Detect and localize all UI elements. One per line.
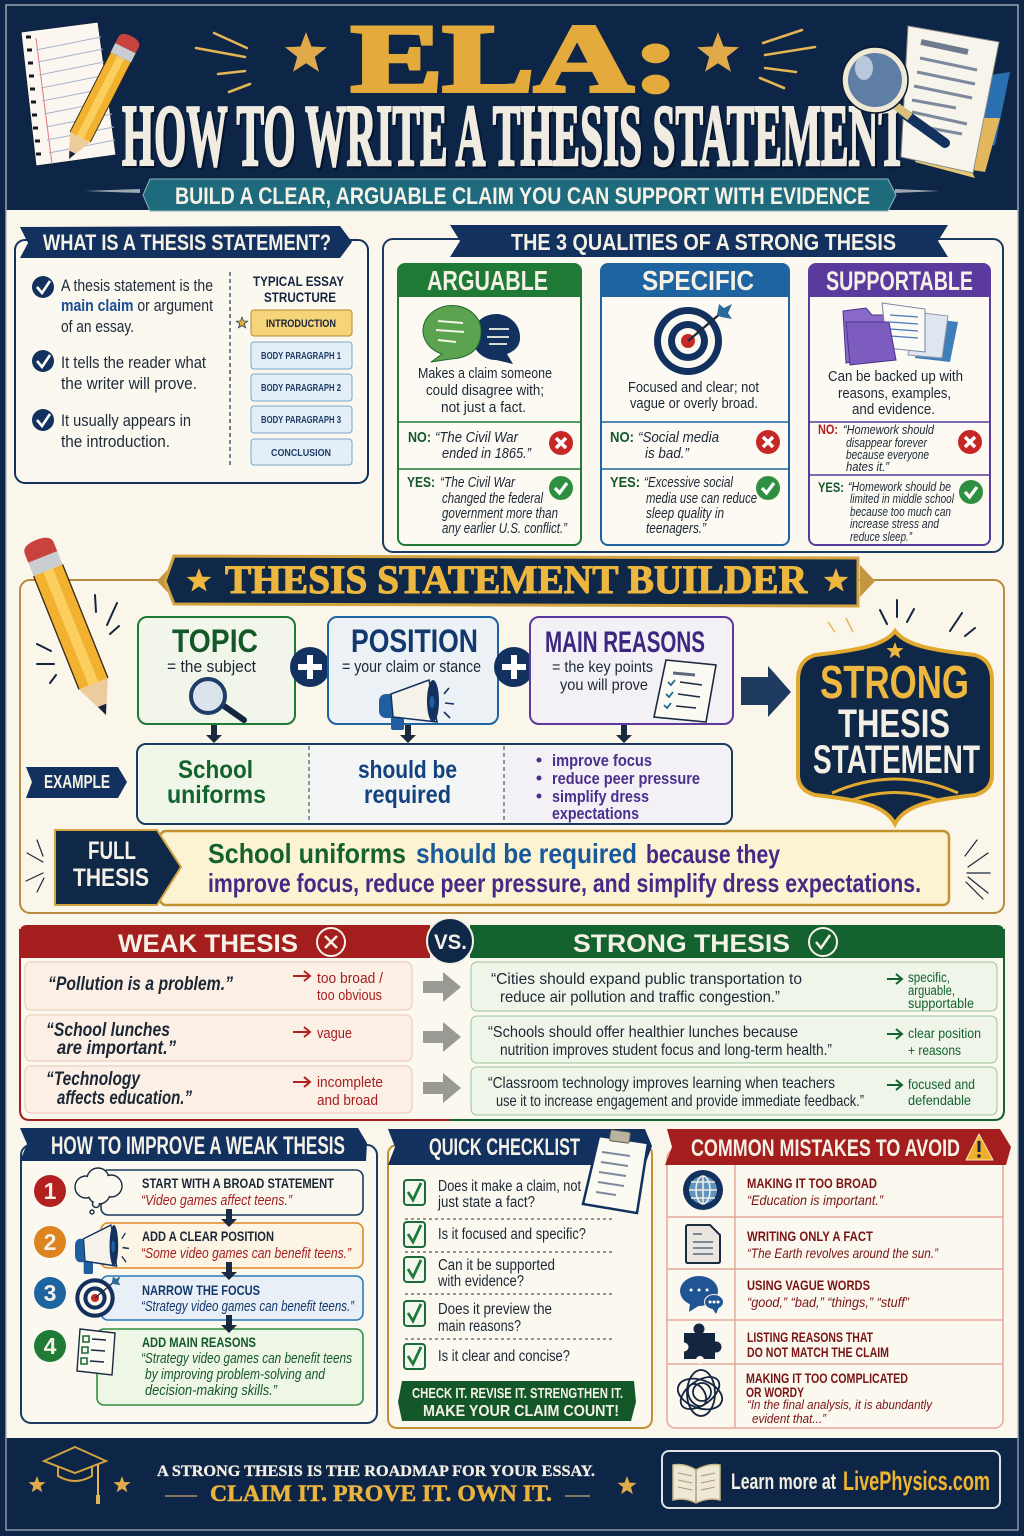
step 4: decision-making skills.” bbox=[145, 1382, 278, 1399]
panel: common mistakes bbox=[665, 1129, 1011, 1428]
card: supportable: disappear forever bbox=[846, 436, 928, 450]
chart: typical essay structure: CONCLUSION bbox=[271, 447, 331, 459]
list: strong examples bbox=[471, 962, 997, 1115]
card: arguable: government more than bbox=[442, 506, 558, 522]
step 4: 4 bbox=[44, 1333, 57, 1359]
box: topic: = the subject bbox=[167, 657, 256, 676]
card: arguable: not just a fact. bbox=[441, 399, 526, 416]
callout: full thesis: THESIS bbox=[73, 864, 149, 892]
callout: learn more bbox=[662, 1451, 1000, 1508]
icon: documents and magnifier bbox=[842, 26, 1010, 178]
header: strong thesis bbox=[470, 925, 1004, 958]
badge: strong thesis statement: THESIS bbox=[838, 702, 950, 746]
icon: speech bubbles bbox=[680, 1276, 724, 1314]
icon: large pencil bbox=[22, 534, 120, 721]
icon: graduation cap bbox=[44, 1447, 106, 1504]
box: example row: reduce peer pressure bbox=[552, 769, 700, 788]
row: too broad: MAKING IT TOO BROAD bbox=[747, 1175, 877, 1191]
list: strong examples: reduce air pollution and traffic congestion.” bbox=[500, 989, 780, 1006]
step 3: 3 bbox=[44, 1280, 56, 1306]
box: position: POSITION bbox=[351, 623, 478, 659]
arrow: to strong thesis bbox=[741, 666, 791, 717]
list: strong examples: “Classroom technology improves learning when teachers bbox=[488, 1075, 835, 1092]
callout: check it: MAKE YOUR CLAIM COUNT! bbox=[423, 1403, 619, 1420]
plus sign bbox=[290, 647, 330, 687]
icon: target bbox=[654, 304, 732, 375]
heading: quick checklist: QUICK CHECKLIST bbox=[429, 1134, 580, 1161]
badge: strong thesis statement: STRONG bbox=[820, 656, 969, 708]
step 1: 1 bbox=[44, 1178, 57, 1204]
subtitle ribbon bbox=[85, 179, 940, 211]
card: specific: vague or overly broad. bbox=[630, 395, 758, 412]
row: reasons do not match: LISTING REASONS THAT bbox=[747, 1329, 873, 1345]
card: supportable: hates it.” bbox=[846, 460, 890, 474]
card: supportable: YES: bbox=[818, 479, 844, 495]
box: example row: expectations bbox=[552, 804, 639, 823]
decorative stars bbox=[285, 32, 739, 72]
heading: quick checklist bbox=[388, 1129, 652, 1165]
callout: check it: CHECK IT. REVISE IT. STRENGTHEN IT. bbox=[412, 1385, 623, 1402]
box: position: = your claim or stance bbox=[342, 657, 481, 676]
icon: document bbox=[686, 1225, 720, 1263]
box: main reasons bbox=[530, 617, 733, 724]
icon: clipboard bbox=[583, 1130, 648, 1213]
box: example row bbox=[137, 744, 732, 824]
icon: open book bbox=[673, 1465, 720, 1503]
card: specific: media use can reduce bbox=[646, 491, 757, 507]
list: strong examples: supportable bbox=[908, 996, 974, 1011]
icon: megaphone bbox=[75, 1225, 129, 1274]
card: specific: teenagers.” bbox=[646, 521, 707, 537]
panel: thesis statement builder bbox=[20, 534, 1004, 913]
list: weak examples: and broad bbox=[317, 1092, 378, 1109]
row: too complicated: evident that...” bbox=[752, 1411, 827, 1426]
step 1: START WITH A BROAD STATEMENT bbox=[142, 1175, 334, 1191]
list: strong examples: nutrition improves student focus and long-term health.” bbox=[500, 1042, 832, 1059]
card: supportable: “Homework should be bbox=[848, 480, 951, 494]
card: supportable bbox=[809, 264, 990, 545]
list: definition points: It tells the reader what bbox=[61, 353, 206, 372]
box: example row: should be bbox=[358, 756, 457, 784]
callout: learn more: Learn more at bbox=[731, 1469, 836, 1494]
badge: strong thesis statement bbox=[798, 631, 992, 824]
list: strong examples: “Cities should expand public transportation to bbox=[491, 971, 802, 988]
icon: megaphone bbox=[379, 680, 454, 730]
icon: scribble bbox=[674, 1370, 726, 1416]
step 4: by improving problem-solving and bbox=[145, 1366, 326, 1383]
callout: full thesis: School uniforms bbox=[208, 838, 406, 869]
box: example row: uniforms bbox=[167, 781, 266, 809]
heading: how to improve: HOW TO IMPROVE A WEAK THESIS bbox=[51, 1132, 345, 1160]
list: checklist items: Is it focused and specific? bbox=[438, 1226, 586, 1243]
list: checklist items: main reasons? bbox=[438, 1318, 521, 1335]
icon: pencil bbox=[59, 31, 142, 164]
list: strong examples: “Schools should offer healthier lunches because bbox=[488, 1024, 798, 1041]
card: specific: NO: bbox=[610, 429, 634, 446]
decorative stars bbox=[28, 1476, 637, 1494]
row: reasons do not match: DO NOT MATCH THE CLAIM bbox=[747, 1344, 889, 1360]
row: only a fact: “The Earth revolves around the sun.” bbox=[747, 1245, 939, 1261]
heading: 3 qualities: THE 3 QUALITIES OF A STRONG THESIS bbox=[511, 229, 896, 255]
list: checklist items: Does it preview the bbox=[438, 1301, 552, 1318]
step 3: “Strategy video games can benefit teens.” bbox=[141, 1298, 355, 1315]
tag: example bbox=[26, 767, 127, 798]
list: strong examples: focused and bbox=[908, 1077, 975, 1092]
step 1 bbox=[34, 1168, 363, 1215]
card: specific: Focused and clear; not bbox=[628, 379, 760, 396]
heading: what is a thesis bbox=[20, 226, 352, 258]
callout: full thesis: because they bbox=[646, 839, 780, 869]
icon: warning bbox=[966, 1134, 993, 1160]
box: main reasons: = the key points bbox=[552, 659, 653, 676]
arrows: between steps bbox=[221, 1209, 237, 1333]
subtitle ribbon: BUILD A CLEAR, ARGUABLE CLAIM YOU CAN SUPPORT WITH EVIDENCE bbox=[175, 183, 870, 210]
row: too complicated: “In the final analysis, it is abundantly bbox=[747, 1397, 933, 1412]
card: specific bbox=[601, 264, 789, 545]
card: specific: sleep quality in bbox=[646, 506, 724, 522]
list: weak examples: incomplete bbox=[317, 1074, 383, 1091]
panel: quick checklist bbox=[388, 1129, 652, 1428]
panel: how to improve a weak thesis bbox=[20, 1128, 377, 1423]
card: supportable: NO: bbox=[818, 422, 838, 437]
chart: typical essay structure: BODY PARAGRAPH 3 bbox=[261, 414, 341, 426]
row: too complicated: OR WORDY bbox=[746, 1384, 804, 1400]
list: weak examples: vague bbox=[317, 1025, 352, 1042]
list: strong examples: clear position bbox=[908, 1026, 981, 1041]
box: main reasons: you will prove bbox=[560, 677, 648, 694]
list: weak examples: “Technology bbox=[46, 1069, 141, 1090]
plus sign bbox=[494, 647, 534, 687]
icon: speech bubbles bbox=[423, 306, 520, 364]
row: vague words: USING VAGUE WORDS bbox=[747, 1277, 870, 1293]
step 2: “Some video games can benefit teens.” bbox=[141, 1245, 352, 1262]
step 1: “Video games affect teens.” bbox=[141, 1192, 293, 1209]
row: too broad: “Education is important.” bbox=[747, 1192, 884, 1208]
card: arguable: any earlier U.S. conflict.” bbox=[442, 521, 568, 537]
card: arguable: changed the federal bbox=[442, 491, 544, 507]
list: definition points bbox=[32, 276, 213, 451]
chart: typical essay structure: BODY PARAGRAPH 1 bbox=[261, 350, 341, 362]
card: supportable: SUPPORTABLE bbox=[826, 266, 973, 296]
header: strong thesis: STRONG THESIS bbox=[573, 930, 790, 958]
card: supportable: and evidence. bbox=[852, 401, 935, 418]
list: definition points: of an essay. bbox=[61, 317, 134, 336]
card: supportable: “Homework should bbox=[843, 423, 935, 437]
callout: full thesis bbox=[55, 830, 949, 905]
tag: example: EXAMPLE bbox=[44, 772, 110, 792]
row: reasons do not match bbox=[680, 1324, 889, 1364]
box: example row: improve focus bbox=[552, 751, 652, 770]
box: example row: simplify dress bbox=[552, 787, 649, 806]
callout: full thesis: should be required bbox=[416, 838, 637, 869]
box: example row: required bbox=[364, 781, 451, 809]
card: specific: “Excessive social bbox=[644, 475, 734, 491]
text: claim it: CLAIM IT. PROVE IT. OWN IT. bbox=[210, 1481, 552, 1506]
list: strong examples: arguable, bbox=[908, 983, 955, 998]
step 4: “Strategy video games can benefit teens bbox=[141, 1350, 352, 1367]
list: strong examples: use it to increase engagement and provide immediate feedback.” bbox=[496, 1093, 864, 1110]
row: vague words bbox=[680, 1276, 910, 1314]
box: example row: School bbox=[178, 756, 253, 784]
callout: full thesis: FULL bbox=[88, 837, 136, 865]
row: only a fact bbox=[686, 1225, 939, 1263]
card: arguable: YES: bbox=[407, 474, 435, 491]
step 2: ADD A CLEAR POSITION bbox=[142, 1228, 274, 1244]
list: weak examples: too obvious bbox=[317, 987, 382, 1004]
card: arguable: could disagree with; bbox=[426, 382, 544, 399]
list: checklist items: Is it clear and concise? bbox=[438, 1348, 570, 1365]
title: ELA: ELA: bbox=[351, 5, 679, 112]
step 2: 2 bbox=[44, 1229, 56, 1255]
list: checklist items bbox=[404, 1178, 612, 1369]
icon: notepad bbox=[21, 22, 116, 166]
row: too complicated bbox=[674, 1370, 933, 1426]
panel: the 3 qualities bbox=[383, 225, 1003, 552]
list: strong examples: defendable bbox=[908, 1093, 971, 1108]
card: supportable: Can be backed up with bbox=[828, 368, 963, 385]
card: arguable: “The Civil War bbox=[435, 430, 519, 446]
card: arguable bbox=[398, 264, 581, 545]
panel: what is a thesis statement bbox=[15, 226, 368, 483]
card: supportable: reduce sleep.” bbox=[850, 530, 913, 544]
card: arguable: NO: bbox=[408, 429, 431, 446]
row: only a fact: WRITING ONLY A FACT bbox=[747, 1228, 873, 1244]
chart: typical essay structure: BODY PARAGRAPH 2 bbox=[261, 382, 341, 394]
list: checklist items: Can it be supported bbox=[438, 1257, 555, 1274]
list: strong examples: + reasons bbox=[908, 1043, 961, 1058]
card: specific: is bad.” bbox=[645, 446, 690, 462]
heading: what is a thesis: WHAT IS A THESIS STATEMENT? bbox=[43, 230, 331, 255]
card: specific: YES: bbox=[610, 474, 640, 491]
badge: vs bbox=[427, 918, 473, 964]
box: topic bbox=[138, 617, 295, 724]
list: definition points: the introduction. bbox=[61, 432, 170, 451]
chart: typical essay structure: TYPICAL ESSAY bbox=[253, 274, 344, 289]
card: supportable: because everyone bbox=[846, 448, 929, 462]
icon: globe bbox=[683, 1170, 723, 1210]
step 3: NARROW THE FOCUS bbox=[142, 1282, 260, 1298]
arrows: weak to strong bbox=[423, 972, 461, 1103]
chart: typical essay structure: INTRODUCTION bbox=[266, 318, 336, 330]
card: supportable: limited in middle school bbox=[850, 492, 955, 506]
row: vague words: “good,” “bad,” “things,” “stuff” bbox=[747, 1294, 910, 1310]
badge: vs: VS. bbox=[434, 931, 467, 954]
list: weak examples: are important.” bbox=[57, 1038, 176, 1059]
box: position bbox=[328, 617, 498, 730]
icon: checklist paper bbox=[654, 660, 716, 722]
callout: check it bbox=[398, 1381, 636, 1421]
card: specific: “Social media bbox=[638, 430, 719, 446]
list: weak examples: “School lunches bbox=[46, 1020, 170, 1041]
list: definition points: main claim or argument bbox=[61, 296, 213, 315]
step 4: ADD MAIN REASONS bbox=[142, 1334, 256, 1350]
list: definition points: It usually appears in bbox=[61, 411, 191, 430]
heading: builder banner: THESIS STATEMENT BUILDER bbox=[225, 557, 808, 602]
arrows: down to example bbox=[206, 725, 632, 743]
header: weak thesis: WEAK THESIS bbox=[118, 930, 298, 958]
list: weak examples bbox=[25, 962, 412, 1113]
icon: thought cloud bbox=[75, 1168, 122, 1214]
icon: folder and papers bbox=[843, 303, 958, 365]
card: arguable: Makes a claim someone bbox=[418, 365, 552, 382]
list: definition points: the writer will prove. bbox=[61, 374, 197, 393]
list: checklist items: with evidence? bbox=[437, 1273, 524, 1290]
list: weak examples: affects education.” bbox=[57, 1088, 192, 1109]
chart: typical essay structure bbox=[236, 274, 352, 465]
header: weak thesis bbox=[20, 925, 430, 958]
list: definition points: A thesis statement is the bbox=[61, 276, 213, 295]
icon: target bbox=[75, 1277, 121, 1318]
card: arguable: ARGUABLE bbox=[427, 265, 548, 296]
list: checklist items: just state a fact? bbox=[437, 1194, 535, 1211]
list: weak examples: too broad / bbox=[317, 970, 384, 987]
box: main reasons: MAIN REASONS bbox=[545, 626, 705, 659]
icon: magnifier bbox=[191, 679, 244, 720]
panel: weak vs strong thesis bbox=[20, 918, 1004, 1120]
card: supportable: reasons, examples, bbox=[838, 385, 951, 402]
card: arguable: “The Civil War bbox=[440, 475, 516, 491]
card: arguable: ended in 1865.” bbox=[442, 446, 532, 462]
heading: how to improve bbox=[20, 1128, 367, 1161]
row: too complicated: MAKING IT TOO COMPLICATED bbox=[746, 1370, 908, 1386]
step 2 bbox=[34, 1223, 363, 1274]
heading: common mistakes bbox=[665, 1129, 1011, 1165]
step 3 bbox=[34, 1276, 363, 1320]
list: checklist items: Does it make a claim, not bbox=[438, 1178, 582, 1195]
icon: checklist bbox=[77, 1329, 115, 1375]
list: weak examples: “Pollution is a problem.” bbox=[48, 974, 233, 995]
icon: puzzle piece bbox=[680, 1324, 722, 1364]
box: topic: TOPIC bbox=[172, 623, 258, 659]
chart: typical essay structure: STRUCTURE bbox=[264, 290, 336, 305]
card: supportable: because too much can bbox=[850, 505, 951, 519]
step 4 bbox=[34, 1329, 363, 1405]
list: strong examples: specific, bbox=[908, 970, 950, 985]
card: specific: SPECIFIC bbox=[642, 265, 754, 296]
row: too broad bbox=[683, 1170, 884, 1210]
card: supportable: increase stress and bbox=[850, 517, 940, 531]
text: roadmap: A STRONG THESIS IS THE ROADMAP FOR YOUR ESSAY. bbox=[157, 1463, 595, 1480]
